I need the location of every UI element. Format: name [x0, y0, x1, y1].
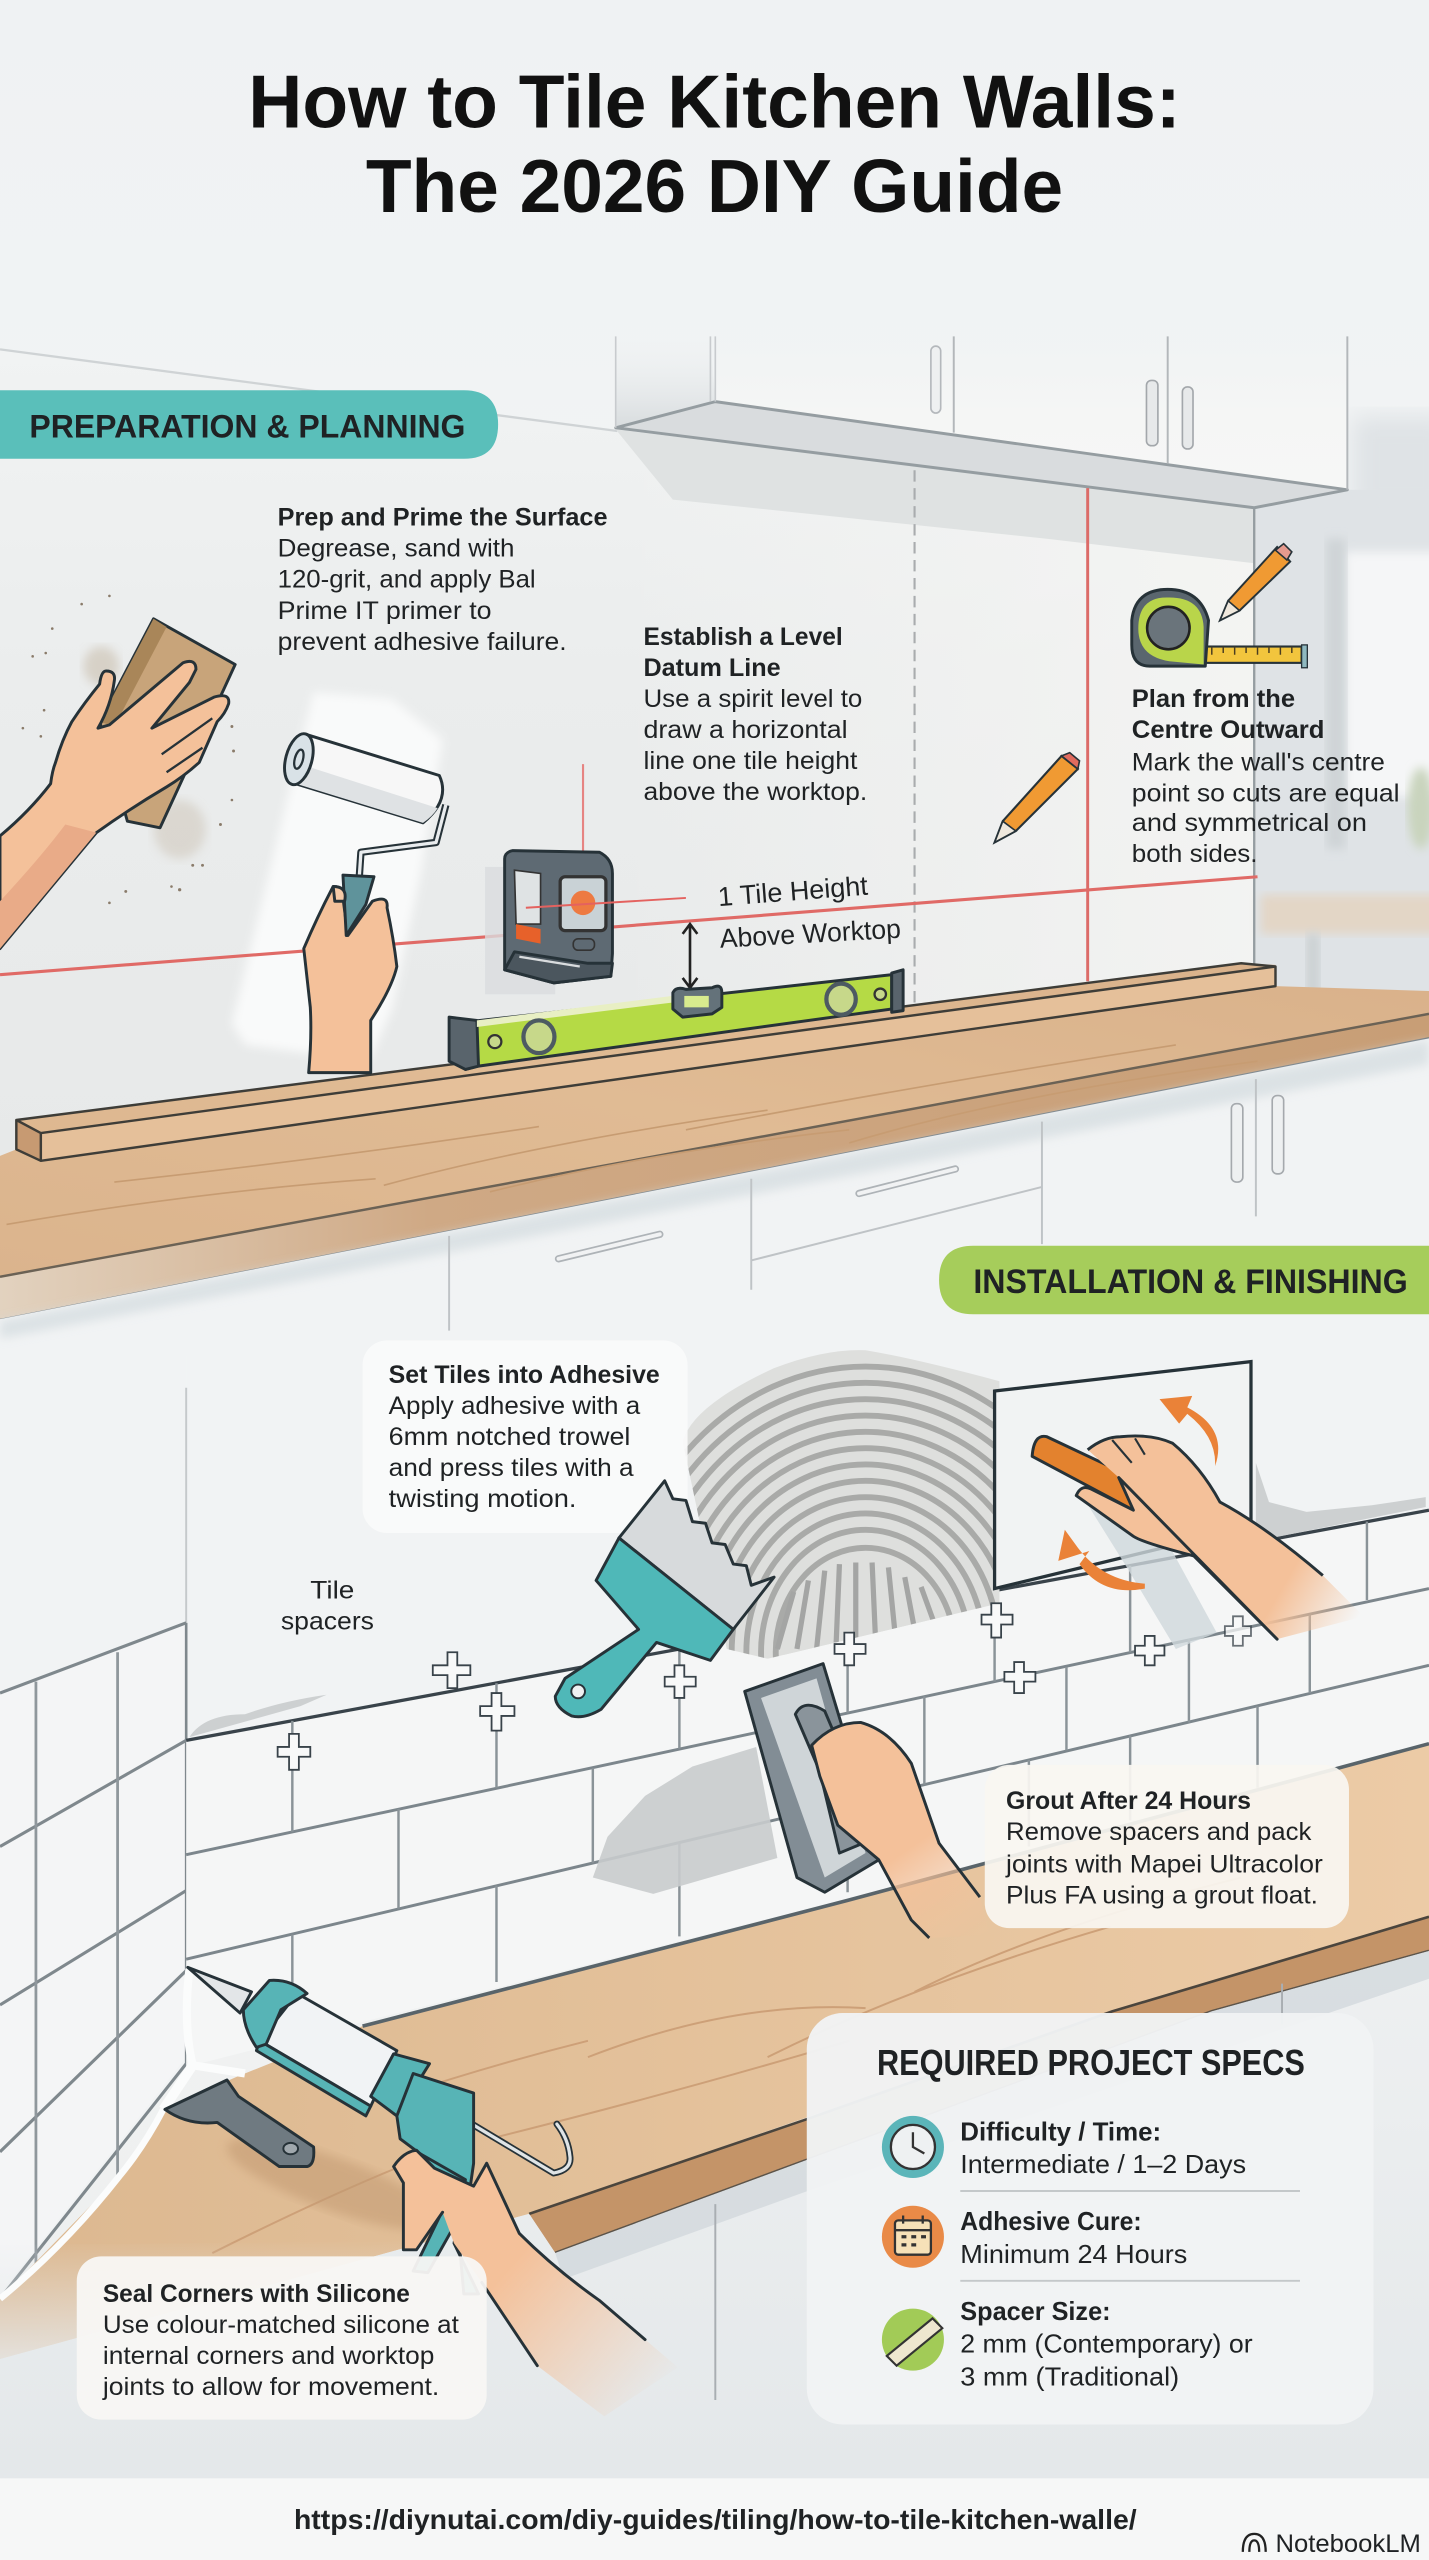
text: prep and prime: Prime IT primer to — [278, 597, 492, 625]
upper kitchen scene — [0, 336, 1429, 1156]
text: plan from centre: Centre Outward — [1132, 716, 1324, 744]
icon: notched trowel — [555, 1481, 774, 1717]
text: level datum line: Establish a Level — [643, 623, 843, 651]
callout: grout: Plus FA using a grout float. — [1006, 1882, 1318, 1910]
upper cabinets — [616, 336, 1347, 508]
section tag: installation and finishing: INSTALLATION & FINISHING — [973, 1263, 1408, 1301]
icon: calendar — [882, 2206, 944, 2268]
white primer patch — [232, 692, 443, 1061]
panel: required project specs — [807, 2013, 1373, 2424]
section tag: preparation and planning — [0, 390, 498, 459]
main wall tile courses — [186, 1510, 1429, 2067]
wall shading under cabinets — [616, 429, 1254, 563]
text: plan from centre: and symmetrical on — [1132, 809, 1367, 837]
centre guide dashed line — [914, 470, 916, 1004]
icon: tape measure and pencil — [1132, 544, 1307, 668]
notebooklm badge: NotebookLM — [1275, 2530, 1421, 2558]
icon: spirit level — [449, 970, 903, 1069]
spec: adhesive cure: Minimum 24 Hours — [960, 2239, 1187, 2269]
label: tile spacers: spacers — [281, 1607, 374, 1635]
callout: set tiles: 6mm notched trowel — [389, 1423, 630, 1451]
callout: grout: joints with Mapei Ultracolor — [1005, 1851, 1323, 1879]
tile being set — [995, 1362, 1251, 1589]
text: level datum line: Use a spirit level to — [643, 685, 862, 713]
text: plan from centre: both sides. — [1132, 840, 1258, 868]
icon: clock — [882, 2116, 944, 2178]
base cabinets — [0, 1038, 1429, 1355]
blurred room background — [1256, 416, 1429, 1045]
text: level datum line: Datum Line — [643, 654, 781, 682]
spec: spacer size: 3 mm (Traditional) — [960, 2361, 1179, 2391]
label: one tile height: 1 Tile Height — [717, 871, 869, 912]
ceiling line — [0, 349, 617, 431]
section tag: preparation and planning: PREPARATION & PLANNING — [29, 408, 465, 445]
icon: caulking gun with hand — [188, 1967, 678, 2416]
adhesive patches at tile base — [189, 1463, 1426, 1894]
label: tile spacers — [281, 1576, 374, 1635]
left return wall tiles — [0, 1353, 186, 2302]
text: level datum line — [643, 623, 867, 806]
label: one tile height: Above Worktop — [719, 914, 902, 954]
callout: grout — [985, 1765, 1349, 1928]
grooved adhesive area — [688, 1350, 1000, 1658]
icon: laser level — [485, 764, 686, 994]
title: The 2026 DIY Guide — [366, 144, 1063, 228]
callout: set tiles: twisting motion. — [389, 1485, 576, 1513]
lower wall background — [186, 1353, 1429, 1750]
icon: spacer strip — [882, 2309, 944, 2371]
callout: set tiles: Apply adhesive with a — [389, 1392, 641, 1420]
spec: difficulty and time — [960, 2116, 1246, 2179]
callout: set tiles — [363, 1340, 688, 1533]
callout: set tiles: and press tiles with a — [389, 1454, 635, 1482]
title — [248, 59, 1181, 228]
icon: rotation arrows — [1058, 1396, 1218, 1590]
text: level datum line: above the worktop. — [643, 778, 867, 806]
callout: seal corners: Seal Corners with Silicone — [103, 2280, 410, 2308]
worktop with batten — [0, 963, 1429, 1320]
spec: difficulty and time: Intermediate / 1–2 Days — [960, 2149, 1246, 2179]
text: prep and prime: 120-grit, and apply Bal — [278, 566, 536, 594]
datum laser line — [0, 877, 1258, 975]
text: prep and prime: Prep and Prime the Surface — [278, 504, 608, 532]
spec: spacer size: 2 mm (Contemporary) or — [960, 2329, 1253, 2359]
title: How to Tile Kitchen Walls: — [248, 59, 1181, 143]
source url: https://diynutai.com/diy-guides/tiling/how-to-tile-kitchen-walle/ — [294, 2504, 1137, 2535]
shadow under hand on tile — [1086, 1502, 1217, 1649]
icon: hand with tile grip — [1032, 1436, 1364, 1639]
icon: pencil on wall — [995, 753, 1080, 842]
label: one tile height — [717, 871, 902, 954]
lower cabinet fronts and floor wash — [0, 1951, 1429, 2478]
callout: seal corners: joints to allow for movement. — [102, 2373, 439, 2401]
callout: seal corners: Use colour-matched silicone at — [103, 2311, 459, 2339]
text: prep and prime — [278, 504, 608, 656]
text: prep and prime: Degrease, sand with — [278, 535, 514, 563]
text: level datum line: draw a horizontal — [643, 716, 848, 744]
label: tile spacers: Tile — [310, 1576, 354, 1604]
upper wall surface — [0, 349, 1256, 1156]
centre red line — [1087, 488, 1089, 981]
spec: adhesive cure: Adhesive Cure: — [960, 2206, 1142, 2236]
icons: tile spacers — [278, 1603, 1251, 1770]
callout: grout: Remove spacers and pack — [1006, 1818, 1312, 1846]
spec: spacer size — [960, 2296, 1253, 2391]
callout: grout: Grout After 24 Hours — [1006, 1787, 1251, 1815]
spec: difficulty and time: Difficulty / Time: — [960, 2116, 1161, 2146]
icon: height arrow — [683, 924, 697, 988]
callout: seal corners: internal corners and worktop — [103, 2342, 434, 2370]
callout: set tiles: Set Tiles into Adhesive — [389, 1361, 660, 1389]
footer band — [0, 2478, 1429, 2560]
wall corner — [1253, 508, 1255, 967]
icon: scraper — [165, 2080, 314, 2167]
icon: paint roller with hand — [279, 731, 446, 1073]
text: prep and prime: prevent adhesive failure. — [278, 628, 567, 656]
text: plan from centre — [1132, 685, 1400, 868]
icon: grout float with hand — [745, 1664, 990, 1938]
text: level datum line: line one tile height — [643, 747, 857, 775]
wooden worktop lower — [0, 1744, 1429, 2384]
icon: sanding block with hand — [0, 595, 235, 949]
text: plan from centre: Mark the wall's centre — [1132, 749, 1385, 777]
callout: seal corners — [77, 2256, 487, 2420]
text: plan from centre: Plan from the — [1132, 685, 1295, 713]
specs heading: REQUIRED PROJECT SPECS — [877, 2042, 1305, 2083]
section tag: installation and finishing — [939, 1246, 1429, 1314]
spec: spacer size: Spacer Size: — [960, 2296, 1111, 2326]
spec: adhesive cure — [960, 2206, 1187, 2269]
text: plan from centre: point so cuts are equal — [1132, 780, 1400, 808]
